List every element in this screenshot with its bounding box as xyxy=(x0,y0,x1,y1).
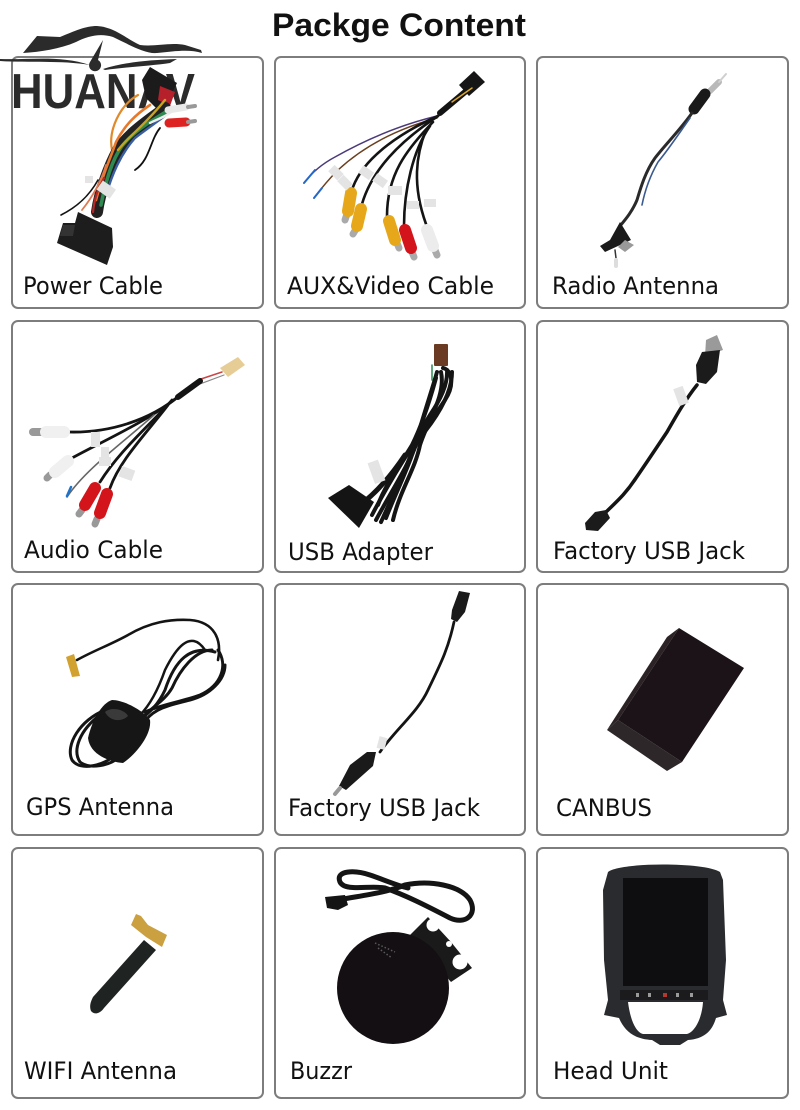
icon: USB adapter cable xyxy=(328,344,452,528)
panel: WIFI antenna: WIFI Antenna xyxy=(24,1057,177,1085)
icon: factory USB cable xyxy=(335,591,470,794)
panel: USB adapter xyxy=(275,321,525,572)
panel: factory USB jack top: Factory USB Jack xyxy=(553,537,745,565)
icon: radio antenna cable xyxy=(600,74,726,266)
panel: radio antenna: Radio Antenna xyxy=(552,272,719,300)
panel: factory USB jack top xyxy=(537,321,788,572)
panel: USB adapter: USB Adapter xyxy=(288,538,433,566)
panel: GPS antenna xyxy=(12,584,263,835)
panel: factory USB jack middle: Factory USB Jack xyxy=(288,794,480,822)
title: Packge Content xyxy=(272,7,526,43)
panel: CANBUS xyxy=(537,584,788,835)
icon: CANBUS box xyxy=(607,628,744,771)
panel: WIFI antenna xyxy=(12,848,263,1098)
panel: head unit: Head Unit xyxy=(553,1057,668,1085)
icon: WIFI antenna xyxy=(90,914,167,1013)
brand logo xyxy=(0,26,202,119)
panel: power cable: Power Cable xyxy=(23,272,163,300)
panel: GPS antenna: GPS Antenna xyxy=(26,793,174,821)
panel: head unit xyxy=(537,848,788,1098)
icon: AUX and video harness xyxy=(304,71,485,257)
panel: AUX and video cable xyxy=(275,57,525,308)
icon: GPS antenna xyxy=(66,620,225,766)
panel: CANBUS: CANBUS xyxy=(556,794,652,822)
icon: factory USB cable xyxy=(585,335,723,531)
icon: buzzer speaker xyxy=(325,872,472,1044)
panel: buzzer: Buzzr xyxy=(290,1057,352,1085)
panel: audio cable: Audio Cable xyxy=(24,536,163,564)
panel: AUX and video cable: AUX&Video Cable xyxy=(287,272,494,300)
icon: audio harness xyxy=(33,357,245,524)
panel: power cable xyxy=(12,57,263,308)
panel: audio cable xyxy=(12,321,263,572)
brand logo: HUANAV xyxy=(11,65,195,119)
panel: factory USB jack middle xyxy=(275,584,525,835)
panel: buzzer xyxy=(275,848,525,1098)
icon: head unit xyxy=(603,864,727,1045)
icon: power cable harness xyxy=(57,67,195,265)
panel: radio antenna xyxy=(537,57,788,308)
